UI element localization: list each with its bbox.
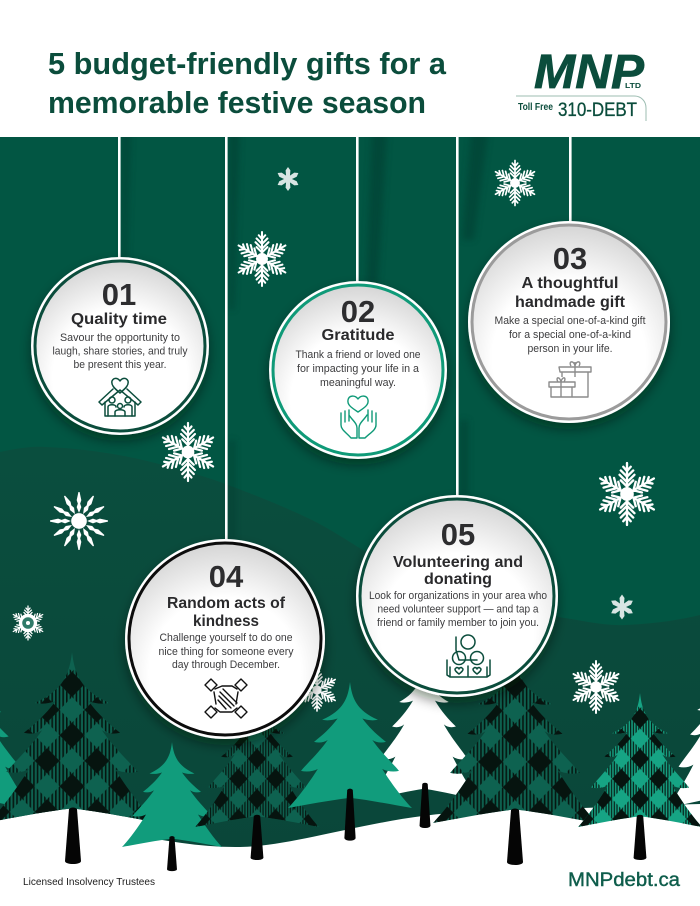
panel: 01 quality time: Quality time — [71, 311, 167, 328]
forest of trees — [0, 652, 700, 871]
logo: MNP Ltd toll free: Toll Free — [518, 102, 553, 113]
text: description 01: Savour the opportunity to — [60, 332, 180, 344]
text: description 05: need volunteer support — and tap a — [378, 604, 539, 616]
snow ground — [0, 804, 700, 906]
text: description 03: for a special one-of-a-kind — [509, 329, 631, 341]
hanging strings — [118, 137, 572, 542]
snowflakes — [11, 160, 658, 713]
text: description 02 — [296, 349, 420, 389]
title: memorable festive season — [48, 85, 426, 120]
panel: 05 volunteering and donating: donating — [424, 571, 492, 588]
logo: MNP Ltd toll free: LTD — [625, 83, 641, 90]
text: description 04: Challenge yourself to do one — [160, 632, 292, 644]
curtain folds — [122, 137, 487, 495]
tree: large green — [288, 682, 412, 841]
tree: small green — [122, 742, 222, 871]
footer: website: MNPdebt.ca — [568, 870, 680, 891]
tree: white — [369, 660, 479, 828]
text: description 01: be present this year. — [74, 359, 166, 371]
tree: far left green — [0, 670, 33, 810]
text: description 02: meaningful way. — [320, 377, 396, 389]
text: description 01: laugh, share stories, and truly — [52, 346, 188, 358]
logo: MNP Ltd toll free: MNP — [534, 46, 645, 99]
panel: 01 quality time: 01 — [102, 277, 136, 312]
text: description 05 — [369, 590, 547, 629]
footer: licensed insolvency trustees: Licensed Insolvency Trustees — [23, 876, 155, 888]
text: description 05: friend or family member to join you. — [377, 617, 539, 629]
tree: far right white — [667, 668, 700, 808]
dark hill — [0, 447, 700, 860]
icon: gift boxes — [549, 362, 591, 397]
panel: 05 volunteering and donating: Volunteering and — [393, 554, 523, 571]
icon: family house with heart — [99, 378, 141, 416]
panel: 02 gratitude — [269, 281, 447, 459]
panel: 03 handmade gift: 03 — [553, 241, 587, 276]
green backdrop — [0, 137, 700, 857]
tree: plaid centre — [195, 693, 319, 860]
text: description 01 — [52, 332, 188, 371]
text: description 03 — [494, 315, 646, 355]
panel: 05 volunteering and donating: 05 — [441, 517, 475, 552]
panel: 03 handmade gift: handmade gift — [515, 294, 626, 311]
text: description 03: Make a special one-of-a-kind gift — [494, 315, 646, 327]
panel: 04 random acts of kindness: 04 — [209, 559, 244, 594]
text: description 02: for impacting your life in a — [297, 363, 420, 375]
text: description 03: person in your life. — [528, 343, 612, 355]
panel: 02 gratitude: 02 — [341, 294, 375, 329]
tree: plaid left — [0, 652, 155, 864]
text: description 04 — [158, 632, 294, 671]
panel: 04 random acts of kindness — [125, 539, 325, 739]
tree: plaid right — [433, 653, 597, 865]
panel: 01 quality time — [31, 257, 209, 435]
title: 5 budget-friendly gifts for a — [48, 46, 447, 81]
logo: MNP Ltd toll free — [516, 46, 646, 121]
tree: plaid bright — [578, 693, 700, 860]
title — [48, 46, 447, 120]
panel: 04 random acts of kindness: kindness — [193, 613, 259, 630]
icon: joined hands — [205, 679, 247, 718]
panel: 03 handmade gift: A thoughtful — [522, 275, 618, 292]
icon: volunteers group — [447, 635, 490, 677]
panel: 05 volunteering and donating — [356, 495, 558, 697]
logo: MNP Ltd toll free: 310-DEBT — [558, 100, 637, 121]
text: description 05: Look for organizations in your area who — [369, 590, 547, 602]
panel: 04 random acts of kindness: Random acts of — [167, 595, 286, 612]
text: description 02: Thank a friend or loved one — [296, 349, 420, 361]
panel: 02 gratitude: Gratitude — [322, 327, 395, 344]
text: description 04: nice thing for someone every — [158, 646, 294, 658]
panel: 03 handmade gift — [468, 221, 670, 423]
icon: hands holding heart — [341, 396, 376, 438]
text: description 04: day through December. — [172, 659, 280, 671]
